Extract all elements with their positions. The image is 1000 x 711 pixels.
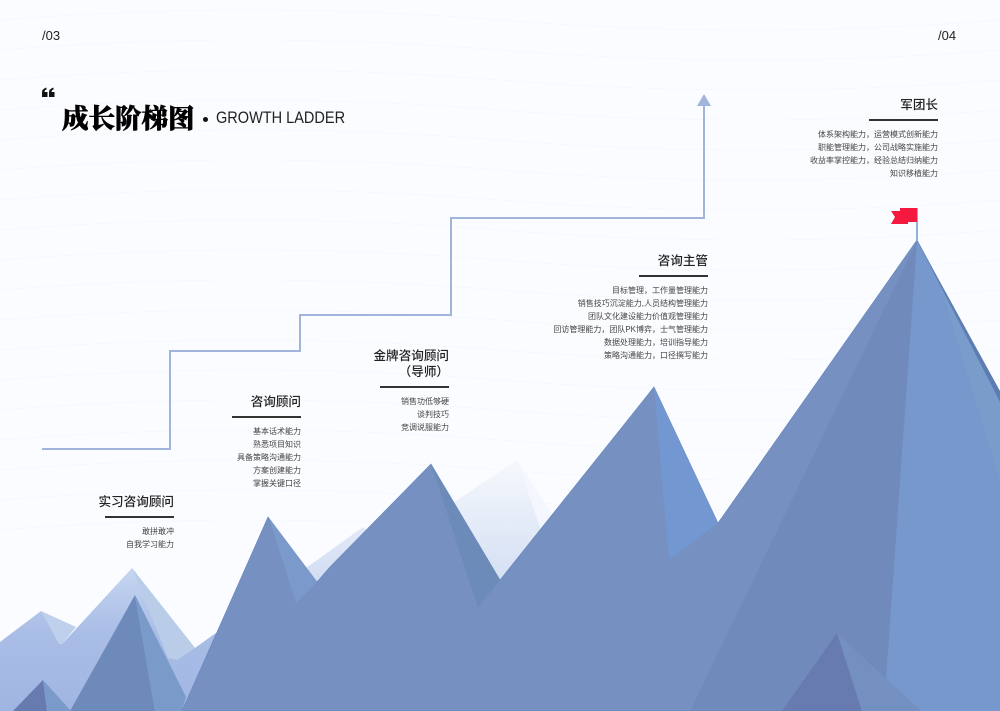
level 4: consulting supervisor: 策略沟通能力，口径撰写能力 bbox=[604, 351, 708, 360]
level 1: intern consultant bbox=[98, 495, 174, 549]
icon: summit flag bbox=[891, 208, 918, 241]
level 1: intern consultant: 自我学习能力 bbox=[126, 540, 174, 549]
page number left: /03 bbox=[42, 28, 60, 43]
level 3: gold consultant bbox=[373, 349, 449, 432]
level 2: consultant: 掌握关键口径 bbox=[253, 479, 301, 488]
title bbox=[62, 104, 345, 134]
left pale ridge bbox=[190, 527, 368, 711]
level 2: consultant: 基本话术能力 bbox=[253, 427, 301, 436]
mid left dark mountain bbox=[70, 595, 186, 711]
far left light mountains bbox=[0, 568, 216, 711]
facet: third peak bbox=[431, 464, 500, 607]
level 1: intern consultant: 敢拼敢冲 bbox=[142, 527, 174, 536]
arrow head bbox=[697, 94, 711, 106]
level 5: legion commander: 体系架构能力，运营模式创新能力 bbox=[818, 130, 938, 139]
facet: summit shadow bbox=[690, 241, 917, 711]
level 2: consultant: 熟悉项目知识 bbox=[253, 440, 301, 449]
level 4: consulting supervisor: 回访管理能力，团队PK博弈，士气管理能力 bbox=[553, 325, 708, 334]
level 4: consulting supervisor: 目标管理，工作量管理能力 bbox=[612, 286, 708, 295]
level 3: gold consultant: 销售功低够硬 bbox=[401, 397, 449, 406]
growth ladder line bbox=[42, 104, 704, 449]
main mountain range bbox=[182, 240, 1000, 711]
icon: quote mark bbox=[42, 88, 54, 97]
level 5: legion commander: 知识移植能力 bbox=[890, 169, 938, 178]
facet: summit right side bbox=[886, 241, 1000, 711]
level 3: gold consultant: （导师） bbox=[399, 365, 449, 379]
title chinese: 成长阶梯图 bbox=[62, 104, 194, 134]
level 4: consulting supervisor bbox=[553, 254, 708, 360]
page number right: /04 bbox=[938, 28, 956, 43]
level 1: intern consultant: 实习咨询顾问 bbox=[98, 495, 174, 509]
small foreground mountain left bbox=[13, 680, 71, 711]
level 4: consulting supervisor: 销售技巧沉淀能力,人员结构管理能力 bbox=[578, 299, 708, 308]
level 3: gold consultant: 谈判技巧 bbox=[417, 410, 449, 419]
level 3: gold consultant: 竞调说服能力 bbox=[401, 423, 449, 432]
level 5: legion commander: 军团长 bbox=[900, 98, 938, 112]
level 4: consulting supervisor: 咨询主管 bbox=[658, 254, 708, 268]
title english: GROWTH LADDER bbox=[216, 109, 345, 127]
level 3: gold consultant: 金牌咨询顾问 bbox=[373, 349, 449, 363]
level 2: consultant: 具备策略沟通能力 bbox=[237, 453, 301, 462]
level 2: consultant: 咨询顾问 bbox=[251, 395, 301, 409]
level 5: legion commander bbox=[810, 98, 938, 178]
level 5: legion commander: 职能管理能力，公司战略实施能力 bbox=[818, 143, 938, 152]
level 5: legion commander: 收益率掌控能力，经验总结归纳能力 bbox=[810, 156, 938, 165]
facet: fourth peak bbox=[654, 387, 718, 560]
level 2: consultant: 方案创建能力 bbox=[253, 466, 301, 475]
title bullet bbox=[203, 117, 208, 122]
back pale mountain bbox=[450, 460, 553, 600]
level 4: consulting supervisor: 数据处理能力，培训指导能力 bbox=[604, 338, 708, 347]
level 4: consulting supervisor: 团队文化建设能力价值观管理能力 bbox=[588, 312, 708, 321]
small foreground mountain right bbox=[782, 633, 921, 711]
level 2: consultant bbox=[232, 395, 301, 488]
facet: second peak bbox=[269, 518, 317, 603]
